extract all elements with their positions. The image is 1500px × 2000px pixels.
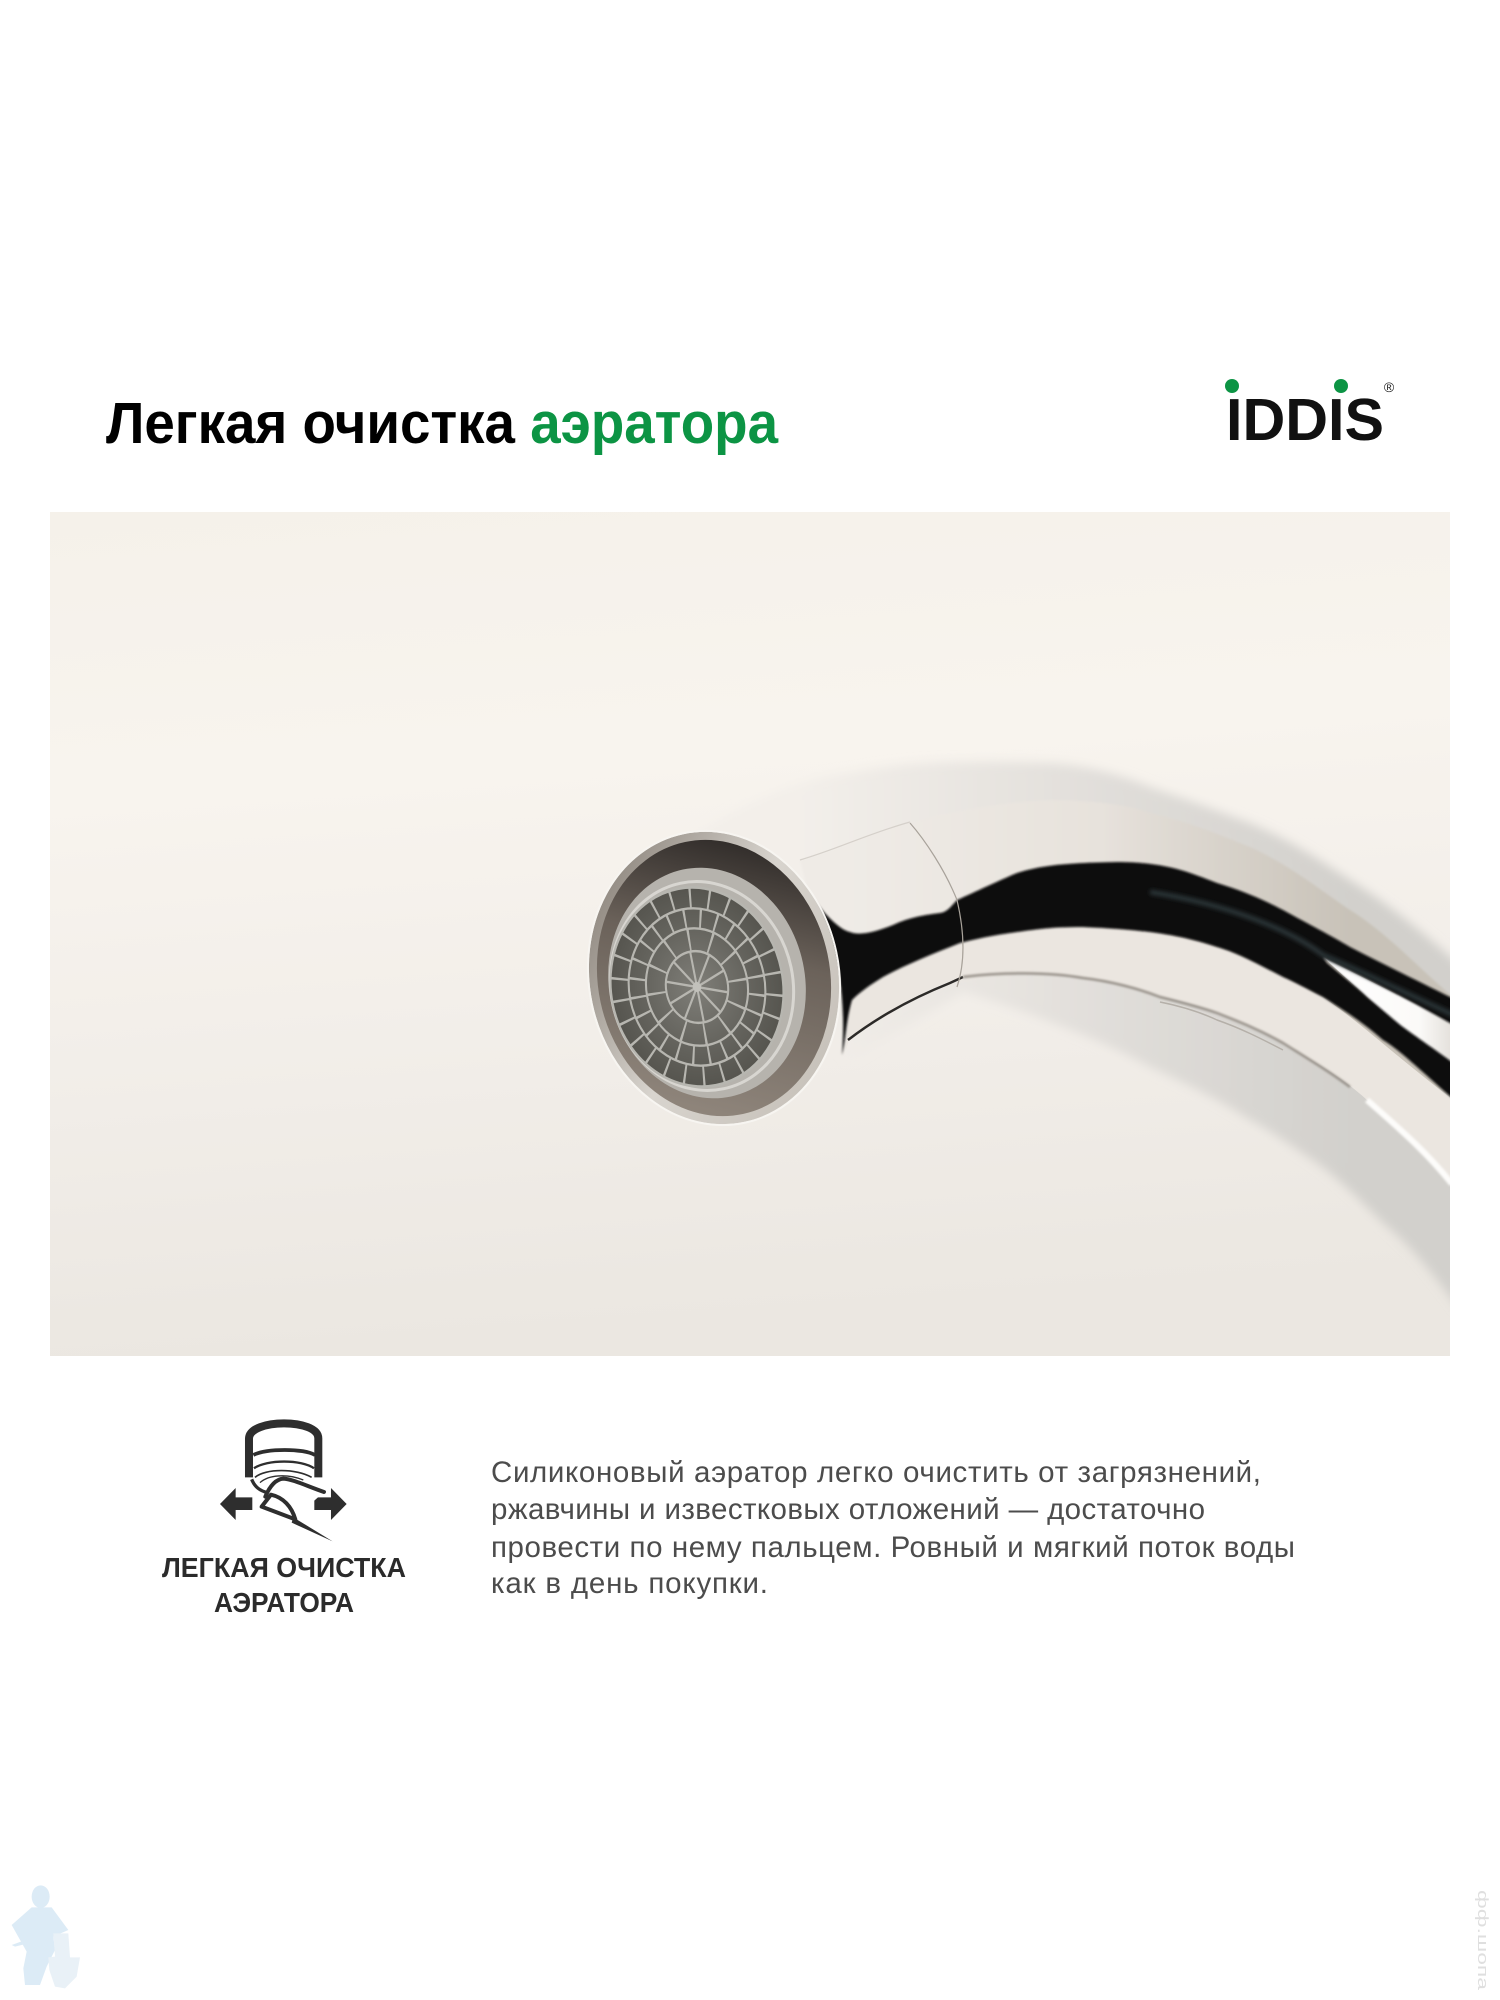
arrow left [220, 1488, 252, 1520]
icon label: АЭРАТОРА [214, 1587, 354, 1618]
grey aerator disc [608, 868, 806, 1098]
nozzle faint line [800, 822, 910, 860]
arrow right [314, 1488, 347, 1520]
lower grey edge line [963, 973, 1350, 1087]
description text: как в день покупки. [491, 1567, 768, 1600]
beige band above reflection [1212, 835, 1450, 1092]
faucet spout body [800, 762, 1450, 1300]
panel: faucet photo [50, 512, 1460, 1356]
white highlight wedge [1324, 958, 1450, 1062]
aerator outline [249, 1423, 318, 1493]
lower white highlight [1367, 1100, 1452, 1184]
icon label [162, 1552, 406, 1618]
watermark: side text: фф.шопа [1474, 1890, 1491, 1991]
dark grey stripe in reflection [1150, 892, 1460, 1018]
aerator nozzle [589, 832, 842, 1126]
lower dark edge line [848, 977, 963, 1040]
outer silhouette [862, 762, 1450, 1300]
description text: Силиконовый аэратор легко очистить от загрязнений, [491, 1456, 1261, 1489]
grate [609, 888, 782, 1086]
description text: провести по нему пальцем. Ровный и мягкий поток воды [491, 1531, 1295, 1564]
logo: IDDIS: IDDIS [1226, 387, 1384, 453]
seam [910, 823, 963, 987]
black reflection [812, 862, 1460, 1105]
finger [260, 1479, 333, 1541]
watermark: plumber [12, 1885, 80, 1988]
icon: aerator cleaning [220, 1423, 347, 1541]
logo: IDDIS: ® [1384, 379, 1395, 395]
description text [491, 1456, 1295, 1600]
title: Легкая очистка аэратора [106, 391, 779, 456]
pale band below reflection [1078, 932, 1450, 1178]
chrome rim [589, 832, 839, 1124]
icon label: ЛЕГКАЯ ОЧИСТКА [162, 1552, 406, 1583]
description text: ржавчины и известковых отложений — достаточно [491, 1493, 1205, 1526]
